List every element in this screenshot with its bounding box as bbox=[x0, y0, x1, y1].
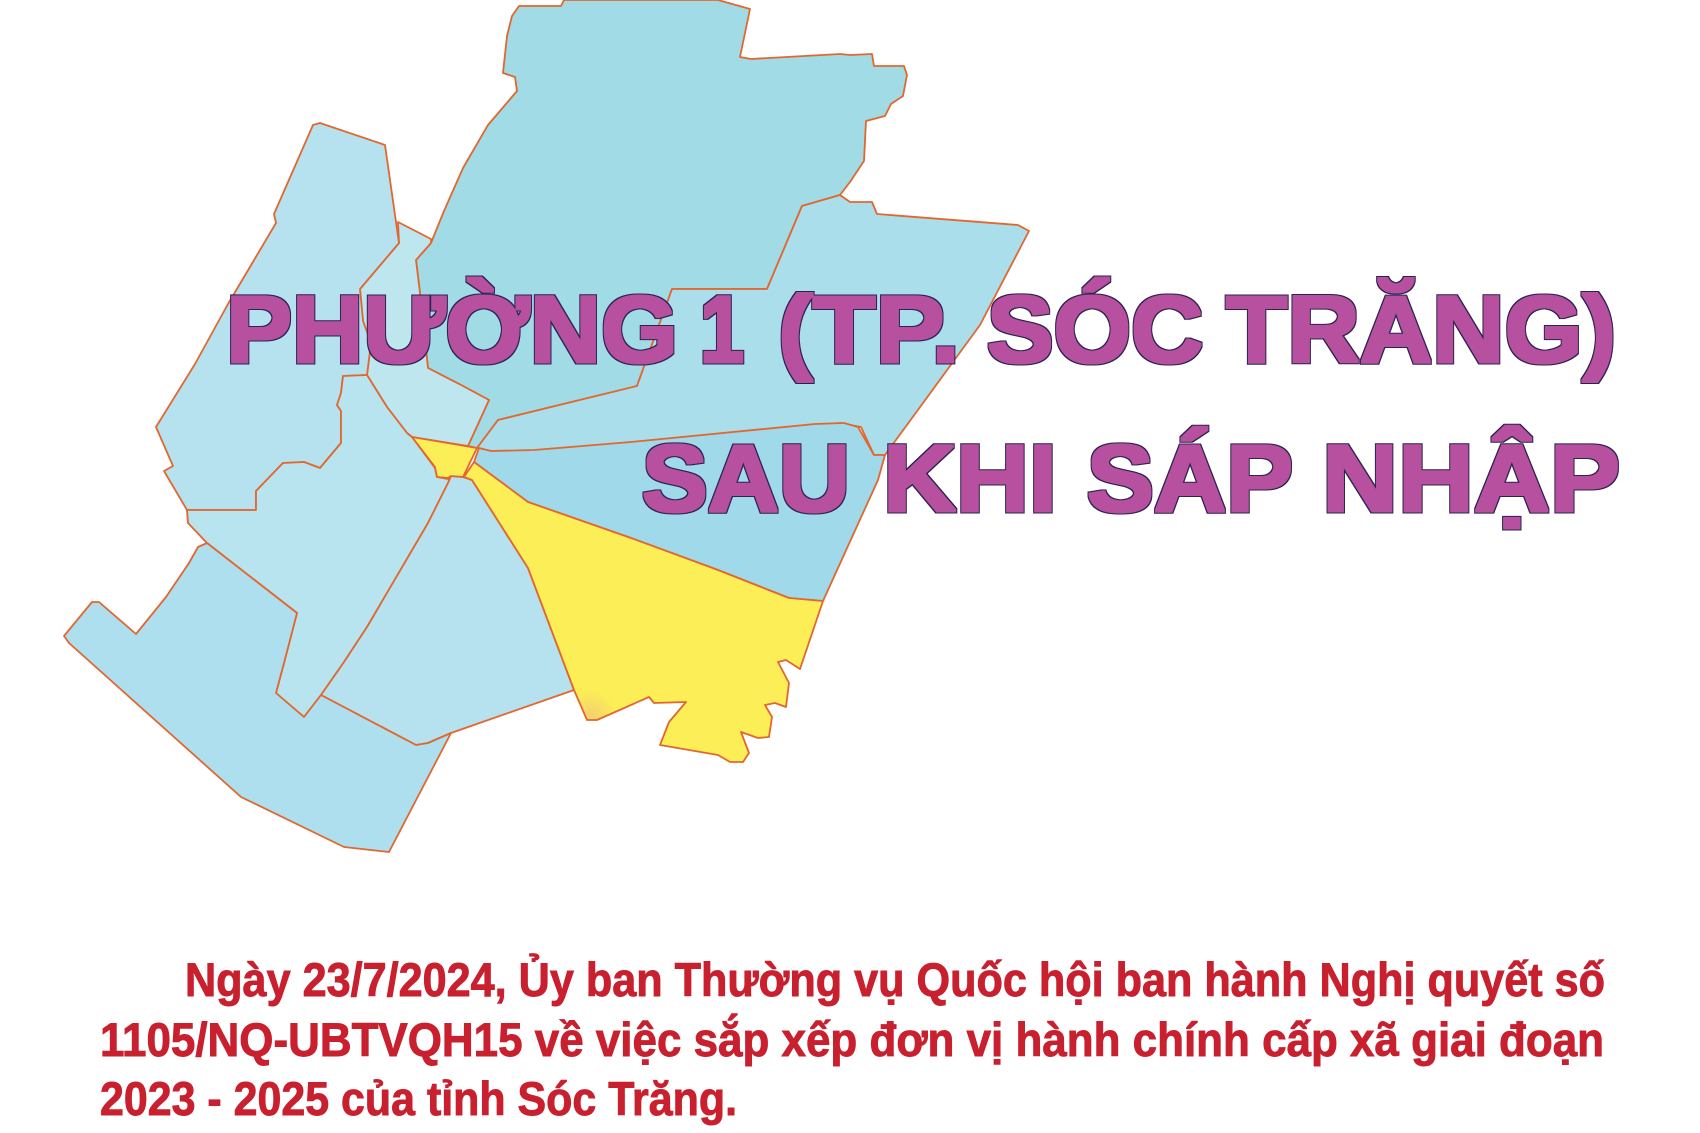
title bbox=[226, 277, 1620, 532]
region: south-east ward bbox=[474, 423, 885, 601]
title line 2 bbox=[642, 426, 1620, 532]
body text bbox=[100, 953, 1605, 1125]
region: south-west ward bbox=[64, 543, 451, 852]
region: highlighted Phuong 1, large part bbox=[464, 462, 823, 762]
title line 2: NHẬP bbox=[1322, 426, 1620, 532]
title line 2: KHI bbox=[883, 426, 1057, 532]
map of wards bbox=[64, 0, 1029, 852]
title line 1: TRĂNG) bbox=[1226, 277, 1616, 383]
region: central-west ward bbox=[187, 375, 451, 717]
body line 1: Ngày 23/7/2024, Ủy ban Thường vụ Quốc hội ban hành Nghị quyết số bbox=[185, 953, 1605, 1006]
region: highlighted Phuong 1, small part bbox=[412, 437, 477, 478]
region: north ward bbox=[416, 0, 907, 448]
title line 1: 1 bbox=[700, 277, 744, 383]
title line 1: PHƯỜNG bbox=[226, 277, 678, 383]
region: central-south ward bbox=[321, 476, 574, 745]
title line 2: SAU bbox=[642, 426, 850, 532]
body line 2: 1105/NQ-UBTVQH15 về việc sắp xếp đơn vị hành chính cấp xã giai đoạn bbox=[100, 1013, 1604, 1066]
body line 3: 2023 - 2025 của tỉnh Sóc Trăng. bbox=[100, 1072, 737, 1125]
region: west ward bbox=[156, 123, 399, 510]
title line 1: SÓC bbox=[987, 277, 1203, 383]
title line 1: (TP. bbox=[778, 277, 960, 383]
region: central small ward bbox=[360, 222, 489, 446]
title line 2: SÁP bbox=[1087, 426, 1293, 532]
region: east ward bbox=[477, 195, 1029, 455]
title line 1 bbox=[226, 277, 1616, 383]
